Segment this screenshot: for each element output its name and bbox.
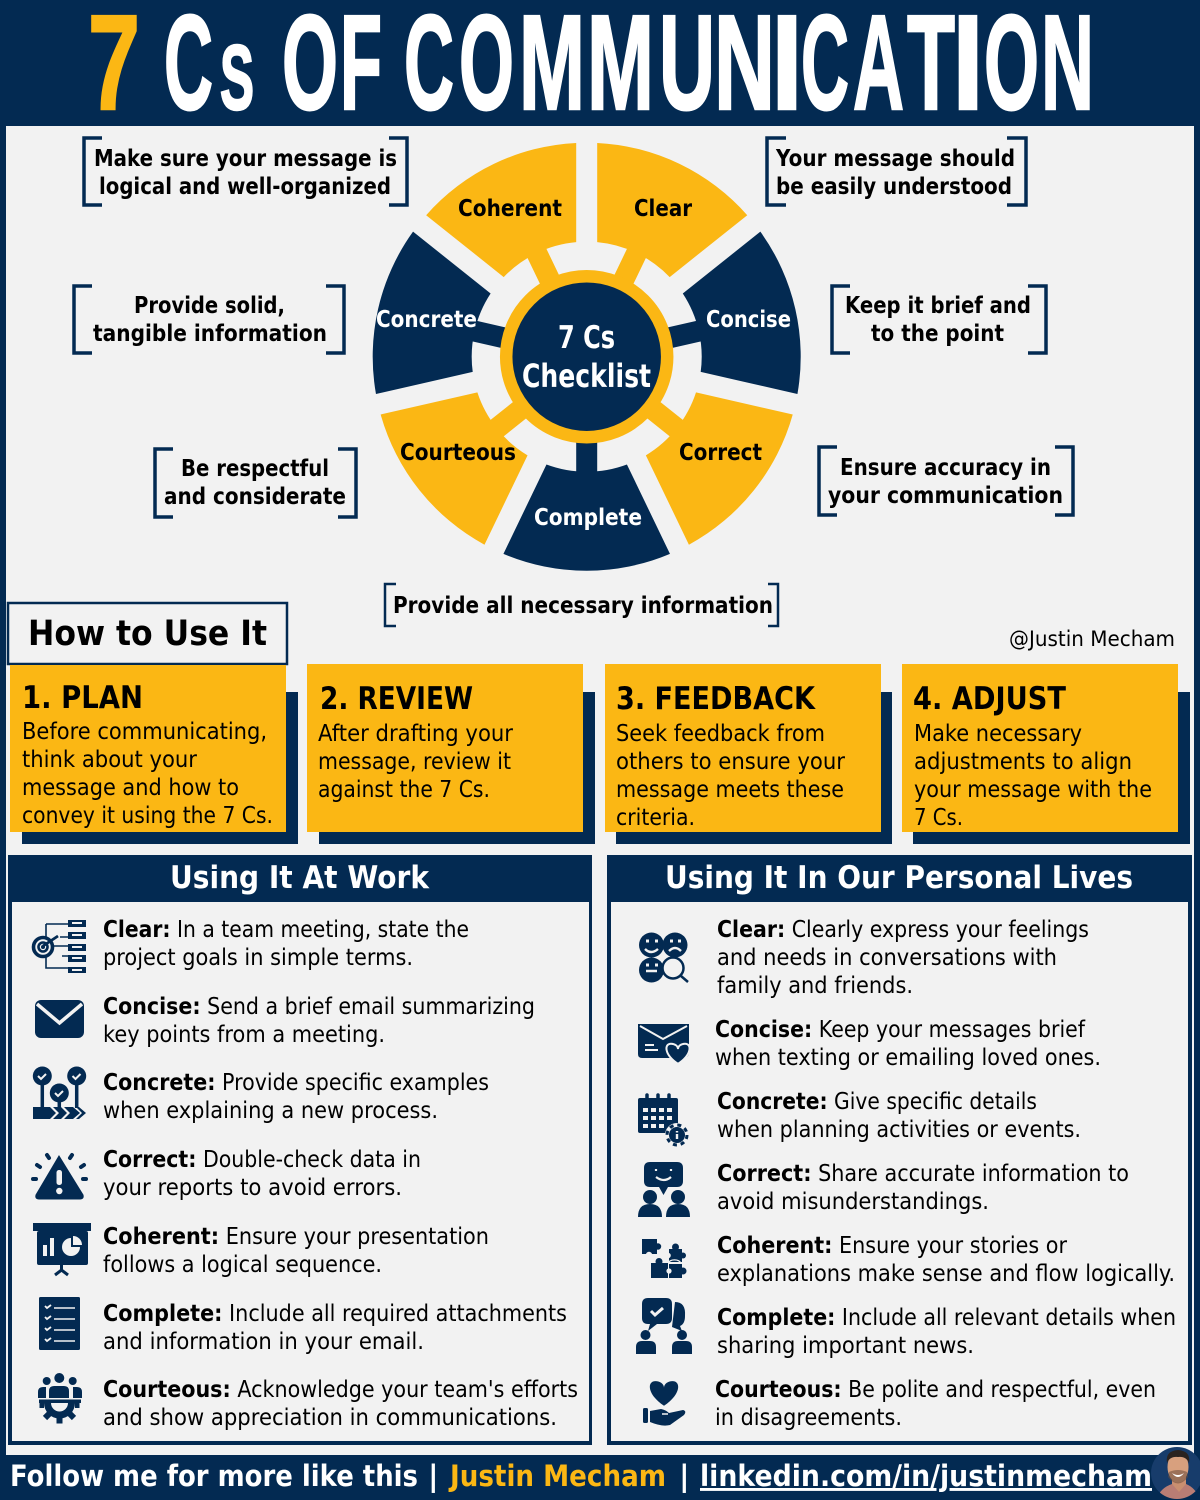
- text: work clear: project goals in simple terms.: [103, 945, 413, 971]
- personal: Clear: [639, 917, 1089, 999]
- text: personal coherent: Coherent: Ensure your stories or: [717, 1233, 1067, 1259]
- icon: calendar with gear: [638, 1095, 689, 1147]
- work: Coherent: [33, 1223, 489, 1278]
- callout: Correct: [819, 447, 1073, 515]
- card: 2. Review: 2. REVIEW: [320, 681, 473, 717]
- heading: How to Use It: How to Use It: [28, 614, 267, 654]
- text: work concrete: [103, 1070, 489, 1124]
- callout: Concise: to the point: [871, 321, 1004, 347]
- text: personal clear: and needs in conversations with: [717, 945, 1057, 971]
- callout: Courteous: Be respectful: [181, 456, 329, 482]
- icon: warning triangle: [33, 1155, 86, 1199]
- icon: team with gear: [38, 1373, 82, 1424]
- personal: Complete: [636, 1298, 1176, 1359]
- callout: Complete: Provide all necessary information: [393, 593, 773, 619]
- text: work courteous: [103, 1377, 578, 1431]
- text: work correct: [103, 1147, 421, 1201]
- label: Clear: Clear: [634, 196, 693, 222]
- text: work complete: Complete: Include all required attachments: [103, 1301, 567, 1327]
- card: 1. Plan: [10, 665, 298, 844]
- callout: Clear: be easily understood: [776, 174, 1012, 200]
- card: 4. Adjust: 7 Cs.: [914, 805, 963, 831]
- card: 4. Adjust: [902, 664, 1190, 844]
- text: work concrete: when explaining a new process.: [103, 1098, 438, 1124]
- personal: Courteous: [643, 1377, 1156, 1431]
- icon: two people and speech bubble: [638, 1162, 690, 1217]
- text: work concise: [103, 994, 535, 1048]
- segment: Clear: [546, 128, 755, 321]
- text: work clear: [103, 917, 469, 971]
- card: 2. Review: [307, 664, 595, 844]
- text: personal concrete: when planning activities or events.: [717, 1117, 1081, 1143]
- icon: target with list: [34, 920, 86, 973]
- callout: Concrete: Provide solid,: [134, 293, 285, 319]
- card: 4. Adjust: adjustments to align: [914, 749, 1132, 775]
- text: work coherent: [103, 1224, 489, 1278]
- icon: people and check bubble: [636, 1298, 692, 1354]
- card: 1. Plan: convey it using the 7 Cs.: [22, 803, 273, 829]
- label: Coherent: Coherent: [458, 196, 562, 222]
- icon: envelope with heart: [638, 1024, 690, 1064]
- callout: Coherent: [84, 138, 407, 205]
- text: work courteous: and show appreciation in communications.: [103, 1405, 557, 1431]
- title: S: [220, 27, 254, 129]
- icon: checklist: [39, 1297, 80, 1350]
- footer: linkedin.com/in/justinmecham: [700, 1459, 1152, 1493]
- text: work concise: key points from a meeting.: [103, 1022, 385, 1048]
- footer: |: [428, 1459, 439, 1493]
- text: personal correct: avoid misunderstandings.: [717, 1189, 989, 1215]
- text: personal concrete: [717, 1089, 1081, 1143]
- panel heading: personal: Using It In Our Personal Lives: [665, 860, 1133, 896]
- center hub: Checklist: [522, 357, 651, 395]
- text: personal complete: sharing important news.: [717, 1333, 974, 1359]
- label: Concise: Concise: [706, 307, 791, 333]
- label: Correct: Correct: [679, 440, 762, 466]
- callout: Concise: [832, 286, 1046, 353]
- card: 2. Review: against the 7 Cs.: [318, 777, 490, 803]
- footer: Justin Mecham: [448, 1459, 666, 1493]
- text: work coherent: Coherent: Ensure your presentation: [103, 1224, 489, 1250]
- text: personal courteous: [715, 1377, 1156, 1431]
- segment: Correct: [597, 341, 806, 555]
- text: personal correct: [717, 1161, 1129, 1215]
- card: 2. Review: message, review it: [318, 749, 511, 775]
- icon: faces with magnifier: [639, 932, 688, 982]
- text: work concrete: Concrete: Provide specific examples: [103, 1070, 489, 1096]
- card: 1. Plan: Before communicating,: [22, 719, 267, 745]
- text: work complete: [103, 1301, 567, 1355]
- callout: Coherent: logical and well-organized: [99, 174, 391, 200]
- icon: hand holding heart: [643, 1381, 685, 1426]
- callout: Correct: Ensure accuracy in: [840, 455, 1051, 481]
- author handle: @Justin Mecham: [1009, 627, 1175, 651]
- label: Courteous: Courteous: [400, 440, 516, 466]
- footer: [10, 1446, 1200, 1500]
- heading: How to Use It: [8, 603, 287, 664]
- panel: Using It In Our Personal Lives: [607, 855, 1192, 1445]
- wheel diagram: 7 Cs checklist: [360, 128, 814, 571]
- text: work courteous: Courteous: Acknowledge your team's efforts: [103, 1377, 578, 1403]
- center hub: 7 Cs: [558, 320, 615, 356]
- title: [88, 0, 1094, 138]
- card: 1. Plan: think about your: [22, 747, 197, 773]
- segment: Concise: [646, 228, 814, 420]
- icon: presentation board: [33, 1223, 91, 1275]
- text: personal complete: [717, 1305, 1176, 1359]
- text: work clear: Clear: In a team meeting, state the: [103, 917, 469, 943]
- footer: |: [679, 1459, 690, 1493]
- personal: Correct: [638, 1161, 1129, 1217]
- panel heading: work: Using It At Work: [170, 860, 430, 896]
- callout: Courteous: [155, 449, 356, 517]
- text: personal clear: family and friends.: [717, 973, 913, 999]
- work: Courteous: [38, 1373, 578, 1431]
- text: personal concise: Concise: Keep your messages brief: [715, 1017, 1086, 1043]
- segment: Complete: [503, 437, 670, 571]
- card: 3. Feedback: others to ensure your: [616, 749, 845, 775]
- callout: Courteous: and considerate: [164, 484, 346, 510]
- text: work concise: Concise: Send a brief email summarizing: [103, 994, 535, 1020]
- text: personal concise: [715, 1017, 1101, 1071]
- text: personal coherent: [717, 1233, 1175, 1287]
- personal: Concrete: [638, 1089, 1081, 1147]
- card: 3. Feedback: criteria.: [616, 805, 695, 831]
- author photo: [1150, 1446, 1200, 1500]
- label: Complete: Complete: [534, 505, 642, 531]
- segment: Courteous: [367, 341, 576, 555]
- text: personal clear: Clear: Clearly express your feelings: [717, 917, 1089, 943]
- card: 4. Adjust: Make necessary: [914, 721, 1082, 747]
- work: Correct: [33, 1147, 421, 1201]
- text: personal courteous: in disagreements.: [715, 1405, 902, 1431]
- work: Clear: [34, 917, 469, 973]
- label: Concrete: Concrete: [376, 307, 477, 333]
- text: personal concise: when texting or emailing loved ones.: [715, 1045, 1101, 1071]
- card: 3. Feedback: 3. FEEDBACK: [616, 681, 816, 717]
- text: work complete: and information in your email.: [103, 1329, 424, 1355]
- personal: Concise: [638, 1017, 1101, 1071]
- center hub: [506, 276, 667, 437]
- work: Complete: [39, 1297, 567, 1355]
- panel: Using It At Work: [8, 855, 592, 1445]
- callout: Complete: [385, 584, 778, 626]
- text: personal courteous: Courteous: Be polite and respectful, even: [715, 1377, 1156, 1403]
- icon: milestones: [33, 1066, 86, 1119]
- work: Concise: [35, 994, 535, 1048]
- card: 3. Feedback: message meets these: [616, 777, 844, 803]
- callout: Concise: Keep it brief and: [845, 293, 1031, 319]
- callout: Concrete: tangible information: [93, 321, 327, 347]
- personal: Coherent: [642, 1233, 1175, 1287]
- callout: Concrete: [74, 286, 344, 353]
- callout: Correct: your communication: [828, 483, 1063, 509]
- segment: Concrete: [360, 228, 527, 420]
- text: work correct: Correct: Double-check data in: [103, 1147, 421, 1173]
- icon: envelope: [35, 1000, 84, 1038]
- card: 1. Plan: 1. PLAN: [22, 680, 143, 716]
- callout: Coherent: Make sure your message is: [94, 146, 397, 172]
- card: 2. Review: After drafting your: [318, 721, 513, 747]
- card: 3. Feedback: [605, 664, 892, 844]
- text: work correct: your reports to avoid errors.: [103, 1175, 402, 1201]
- card: 4. Adjust: 4. ADJUST: [913, 681, 1066, 717]
- text: personal correct: Correct: Share accurate information to: [717, 1161, 1129, 1187]
- segment: Coherent: [419, 128, 627, 321]
- card: 3. Feedback: Seek feedback from: [616, 721, 825, 747]
- text: personal concrete: Concrete: Give specific details: [717, 1089, 1037, 1115]
- card: 1. Plan: message and how to: [22, 775, 239, 801]
- text: personal clear: [717, 917, 1089, 999]
- card: 4. Adjust: your message with the: [914, 777, 1152, 803]
- callout: Clear: Your message should: [775, 146, 1015, 172]
- footer: Follow me for more like this: [10, 1459, 418, 1493]
- callout: Clear: [767, 138, 1026, 205]
- icon: puzzle pieces: [642, 1239, 686, 1278]
- text: work coherent: follows a logical sequence.: [103, 1252, 382, 1278]
- work: Concrete: [33, 1066, 489, 1124]
